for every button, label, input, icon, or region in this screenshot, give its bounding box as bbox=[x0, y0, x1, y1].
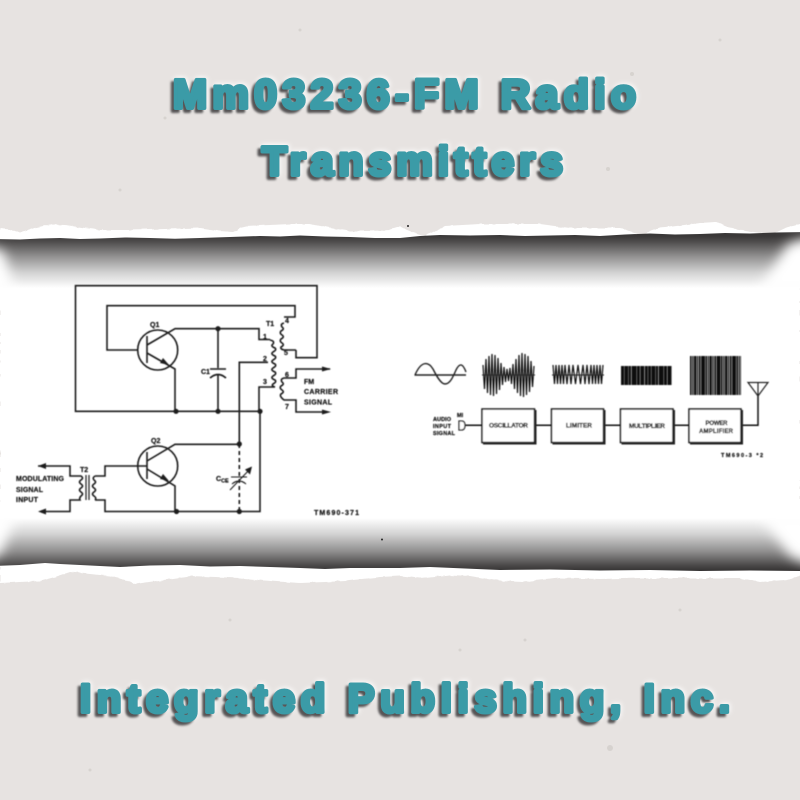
block diagram labels: MI bbox=[457, 413, 464, 419]
outer feedback loop wiring bbox=[76, 286, 317, 411]
power amplifier waveform bbox=[690, 356, 741, 395]
circuit labels: Q2 bbox=[151, 438, 160, 445]
circuit labels: INPUT bbox=[16, 497, 39, 504]
circuit labels: 3 bbox=[263, 379, 267, 386]
transformer T1 primary coil bbox=[239, 340, 276, 444]
title bbox=[173, 71, 636, 184]
block: power amplifier: AMPLIFIER bbox=[699, 429, 734, 435]
block: limiter: LIMITER bbox=[566, 422, 592, 430]
circuit labels: 5 bbox=[284, 350, 288, 357]
circuit labels: C1 bbox=[201, 369, 210, 376]
circuit labels: FM bbox=[304, 379, 314, 386]
block: oscillator bbox=[482, 409, 536, 444]
variable capacitor CCE bbox=[230, 444, 252, 512]
stray specks on tear bbox=[381, 225, 409, 540]
block: power amplifier bbox=[689, 409, 742, 444]
circuit labels bbox=[16, 318, 359, 517]
limiter waveform bbox=[553, 365, 603, 384]
circuit labels: 6 bbox=[285, 372, 289, 379]
torn white middle band bbox=[0, 222, 800, 584]
circuit labels: 7 bbox=[285, 404, 289, 411]
block diagram labels: TM690-3 *2 bbox=[721, 453, 763, 459]
circuit labels: CARRIER bbox=[304, 389, 338, 396]
block: power amplifier: POWER bbox=[706, 421, 728, 427]
transistor Q2 bbox=[138, 444, 239, 512]
FM waveform bbox=[483, 353, 534, 397]
FM transmitter block diagram bbox=[414, 353, 768, 459]
transformer T1 secondary coils bbox=[280, 323, 331, 414]
block diagram labels: INPUT bbox=[433, 424, 452, 430]
block diagram labels bbox=[433, 413, 763, 459]
signal chain wiring bbox=[464, 396, 758, 425]
publisher footer: Integrated Publishing, Inc. bbox=[80, 677, 730, 721]
circuit labels: T2 bbox=[80, 467, 88, 474]
circuit labels: C bbox=[216, 476, 221, 483]
circuit labels: TM690-371 bbox=[314, 510, 359, 517]
top tear shadow bbox=[0, 232, 800, 288]
block diagram labels: AUDIO bbox=[433, 417, 452, 423]
transistor Q1 bbox=[138, 329, 270, 411]
return and input wiring bbox=[95, 411, 260, 512]
block: oscillator: OSCILLATOR bbox=[489, 422, 528, 430]
multiplier waveform bbox=[621, 366, 672, 385]
capacitor C1 bbox=[210, 329, 226, 411]
circuit labels: T1 bbox=[266, 321, 274, 328]
circuit labels: CE bbox=[221, 478, 229, 484]
waveform axes bbox=[482, 374, 604, 376]
circuit labels: 2 bbox=[263, 356, 267, 363]
title: Mm03236-FM Radio bbox=[173, 71, 636, 117]
block: multiplier bbox=[620, 409, 674, 444]
junction dots bbox=[173, 326, 263, 514]
antenna bbox=[748, 382, 768, 396]
circuit labels: SIGNAL bbox=[304, 400, 333, 406]
circuit schematic bbox=[16, 286, 359, 517]
block: multiplier: MULTIPLIER bbox=[629, 423, 665, 430]
circuit labels: 4 bbox=[285, 318, 289, 325]
title: Transmitters bbox=[262, 138, 563, 184]
circuit labels: Q1 bbox=[150, 322, 159, 329]
microphone symbol bbox=[459, 421, 465, 430]
bottom tear shadow bbox=[0, 518, 800, 571]
inner feedback wiring bbox=[107, 306, 295, 350]
block: limiter bbox=[552, 409, 604, 444]
circuit labels: SIGNAL bbox=[16, 487, 44, 494]
paper specks bbox=[88, 28, 722, 772]
circuit labels: MODULATING bbox=[16, 476, 65, 483]
shadow corner fades bbox=[0, 236, 800, 566]
sine wave input bbox=[414, 364, 466, 384]
transformer T2 bbox=[38, 463, 96, 514]
block diagram labels: SIGNAL bbox=[433, 431, 456, 437]
circuit labels: 1 bbox=[263, 334, 267, 341]
